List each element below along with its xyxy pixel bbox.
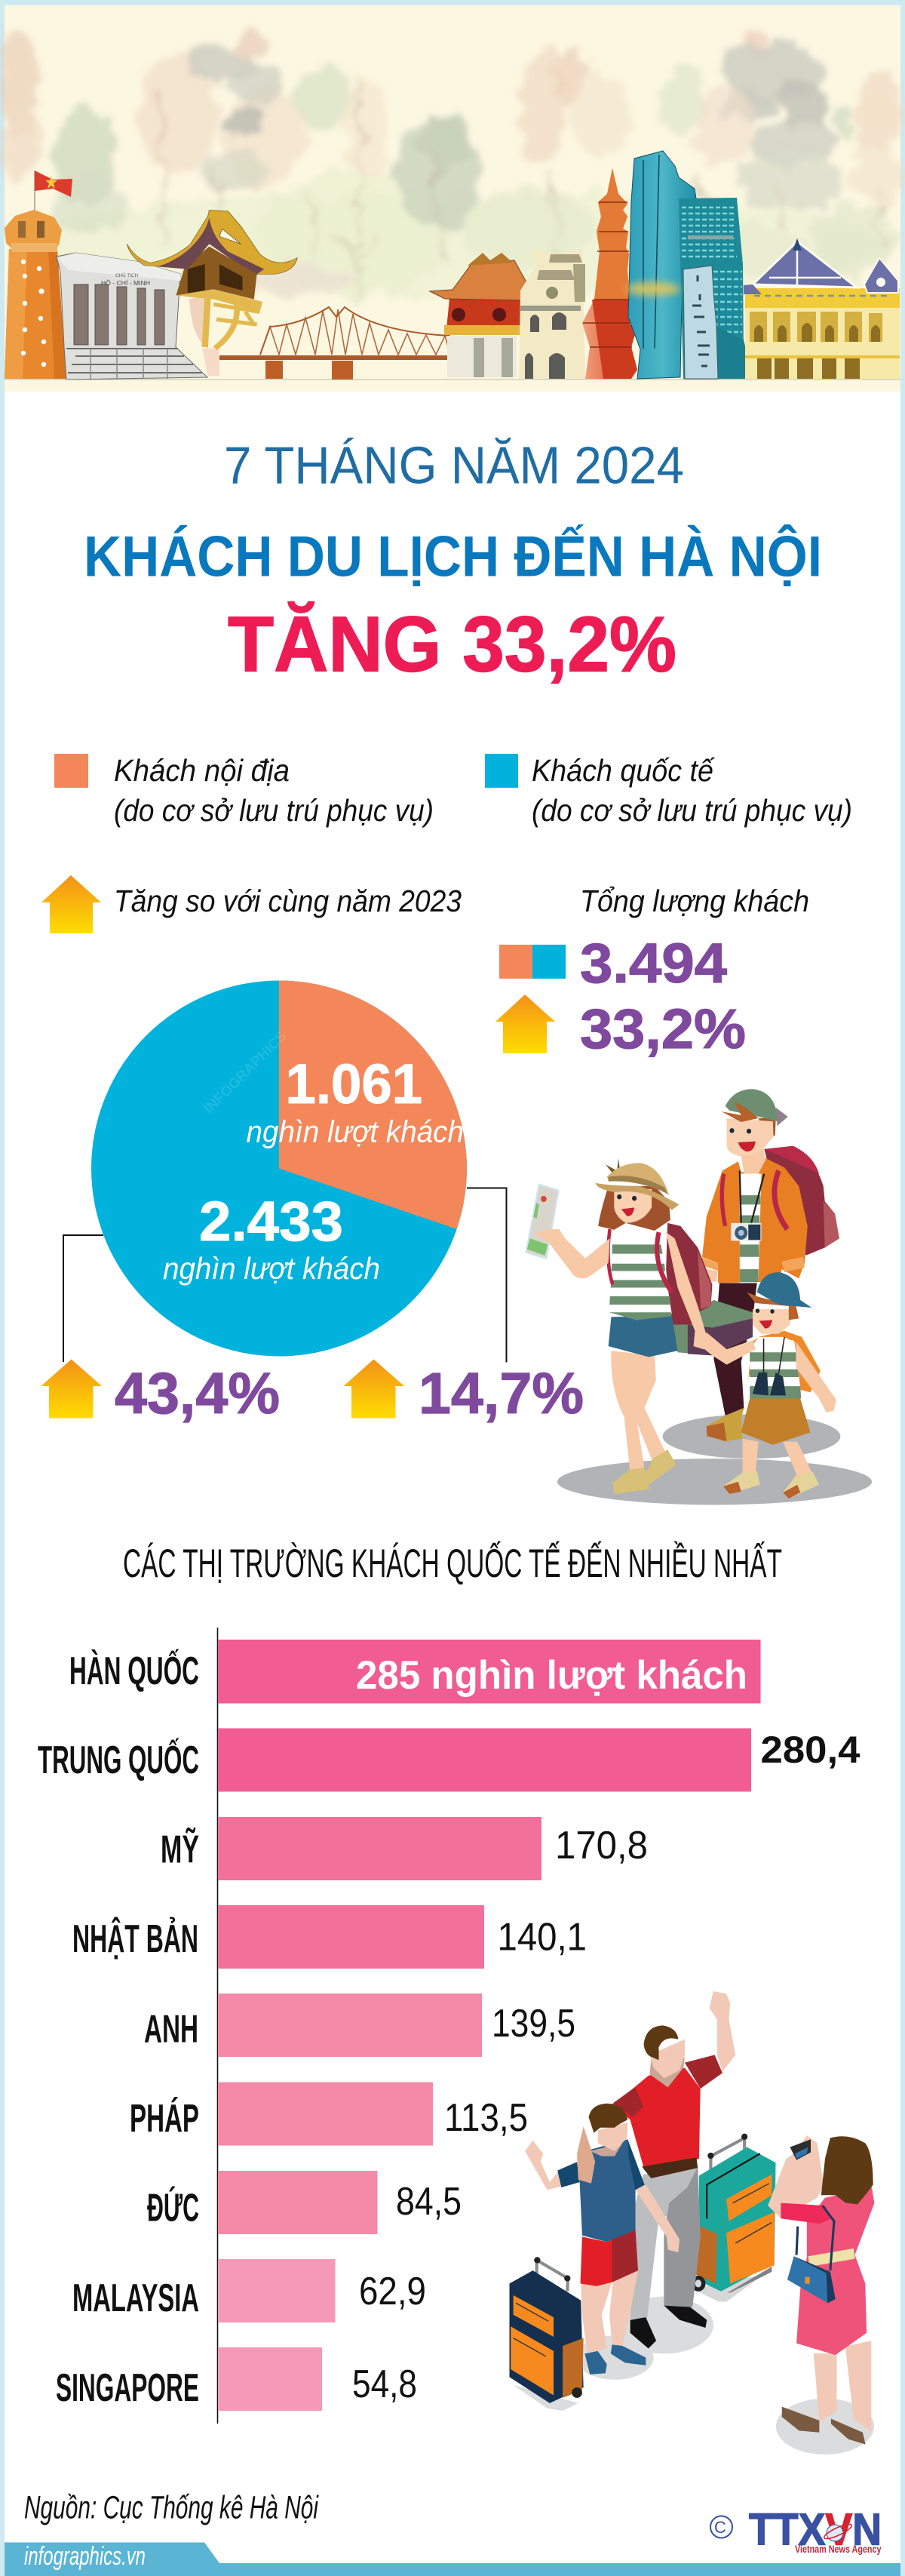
legend: increase arrow [41,875,462,933]
bar: Trung Quốc [38,1728,861,1791]
One Pillar Pagoda [127,210,297,376]
bar: Anh: 139,5 [492,2002,575,2046]
yellow paint smear [626,282,680,296]
legend: international visitors: Khách quốc tế [532,753,716,788]
bar: Singapore: 54,8 [352,2362,417,2406]
bar: Malaysia [72,2259,426,2322]
growth: international [41,1360,280,1426]
Ho Chi Minh mausoleum [57,253,207,380]
unit: domestic: nghìn lượt khách [246,1114,464,1148]
legend: domestic visitors: Khách nội địa [114,753,290,788]
legend: international visitors [485,753,852,828]
bar: Mỹ [161,1817,648,1880]
growth: domestic [344,1360,584,1426]
bar: Nhật Bản [72,1905,587,1969]
Ho Chi Minh mausoleum: HỒ - CHÍ - MINH [101,279,150,287]
footer band [5,2542,900,2576]
legend: domestic visitors: (do cơ sở lưu trú phục vụ) [114,793,434,828]
value: domestic: 1.061 [285,1053,422,1115]
Hanoi Opera House [744,238,900,379]
legend: domestic visitors [54,753,434,828]
illustration: travellers with suitcases [509,1991,874,2455]
Ngoc Son temple [430,253,532,377]
growth: international: 43,4% [115,1361,280,1426]
bar: Nhật Bản: 140,1 [498,1915,587,1959]
bar: Anh [144,1993,575,2057]
total visitors block: 33,2% [580,998,746,1060]
bar: Singapore: SINGAPORE [56,2366,199,2410]
inscription on the mausoleum: CHỦ TỊCH [115,272,138,278]
bar: Trung Quốc: 280,4 [760,1729,861,1771]
title: period: 7 THÁNG NĂM 2024 [224,436,684,495]
watermark: INFOGRAPHICS [201,1028,290,1117]
bar: Pháp: PHÁP [130,2097,199,2141]
bar: Malaysia: 62,9 [359,2270,426,2313]
title: growth figure: TĂNG 33,2% [228,601,676,688]
bar chart: top international markets [38,1628,861,2424]
title: main heading: KHÁCH DU LỊCH ĐẾN HÀ NỘI [84,525,822,589]
connector: domestic to 14,7% [467,1188,507,1363]
teal office tower [679,198,756,379]
TTXVN logo: Vietnam News Agency [795,2544,882,2555]
total visitors block: Tổng lượng khách [580,884,809,918]
total visitors block [495,884,809,1060]
ground line [5,379,900,380]
light blue building [683,266,718,379]
Turtle tower gate [519,249,585,379]
bar: Pháp [130,2083,528,2146]
bar: Hàn Quốc: HÀN QUỐC [69,1649,199,1693]
TTXVN logo: TTXVN [749,2505,882,2555]
bar: Hàn Quốc: 285 nghìn lượt khách [356,1653,747,1698]
bar: Pháp: 113,5 [444,2096,528,2140]
footer site name: infographics.vn [24,2542,146,2571]
header illustration: Hanoi landmarks [0,5,901,392]
total visitors block: 3.494 [580,932,727,994]
growth: domestic: 14,7% [419,1361,584,1426]
bar: Nhật Bản: NHẬT BẢN [72,1917,198,1961]
bar: Malaysia: MALAYSIA [72,2276,199,2320]
unit: international: nghìn lượt khách [163,1251,380,1286]
bar: Đức: 84,5 [396,2180,462,2224]
flag tower [5,171,72,379]
bar: Mỹ: 170,8 [555,1824,648,1867]
TTXVN logo: C [714,2518,726,2537]
connector: international to 43,4% [63,1235,103,1362]
bar: Singapore [56,2347,417,2411]
value: international: 2.433 [199,1190,343,1253]
watercolor trees [0,26,901,302]
bar: Anh: ANH [144,2007,198,2051]
legend: international visitors: (do cơ sở lưu trú phục vụ) [532,793,852,828]
legend: increase arrow: Tăng so với cùng năm 2023 [114,884,462,918]
Long Bien bridge [219,307,450,380]
source note: Nguồn: Cục Thống kê Hà Nội [24,2490,319,2526]
chart axis [217,1628,219,2424]
pie chart [91,981,467,1357]
bar: Đức: ĐỨC [147,2187,199,2230]
blue glass tower [628,151,696,379]
Red pagoda tower [582,168,637,379]
bar: Trung Quốc: TRUNG QUỐC [38,1738,199,1782]
bar: Hàn Quốc [69,1640,760,1704]
bar: Mỹ: MỸ [161,1827,199,1871]
illustration: family of tourists [526,1089,872,1505]
bar: Đức [147,2171,462,2234]
